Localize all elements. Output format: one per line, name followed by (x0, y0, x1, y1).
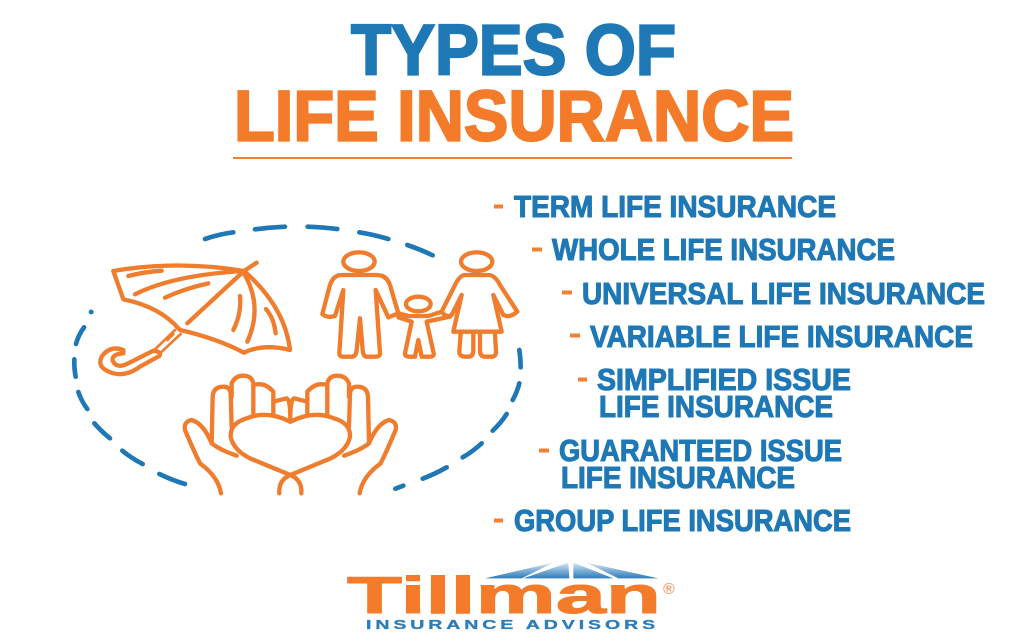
item: variable: VARIABLE LIFE INSURANCE (590, 319, 973, 354)
illustration: icons in dashed ring (74, 227, 521, 493)
list: life insurance types (494, 189, 985, 538)
item: guaranteed issue: LIFE INSURANCE (561, 460, 795, 495)
item: term: TERM LIFE INSURANCE (514, 189, 836, 224)
dashed ellipse ring (74, 227, 521, 489)
item: simplified issue (597, 362, 851, 424)
title line: types of: TYPES OF (351, 12, 676, 90)
child (398, 297, 450, 357)
icon: family (322, 252, 517, 357)
logo tagline: INSURANCE ADVISORS (366, 618, 659, 632)
father (322, 252, 398, 357)
item: guaranteed issue: GUARANTEED ISSUE (559, 433, 842, 468)
icon: umbrella (100, 263, 290, 374)
logo wordmark: Tillman (347, 567, 661, 625)
right hand (290, 376, 396, 493)
item: group: GROUP LIFE INSURANCE (514, 503, 851, 538)
title (234, 12, 794, 156)
item: simplified issue: LIFE INSURANCE (599, 389, 833, 424)
title line: life insurance: LIFE INSURANCE (234, 78, 794, 156)
mother (442, 252, 517, 357)
item: simplified issue: SIMPLIFIED ISSUE (597, 362, 851, 397)
icon: hands holding heart (185, 376, 396, 493)
logo: Tillman Insurance Advisors (347, 563, 675, 632)
orange list dashes (494, 204, 587, 522)
item: universal: UNIVERSAL LIFE INSURANCE (582, 276, 985, 311)
item: whole: WHOLE LIFE INSURANCE (552, 232, 895, 267)
left hand (185, 376, 290, 493)
registered mark: ® (663, 581, 675, 598)
heart (231, 415, 350, 475)
item: guaranteed issue (559, 433, 842, 495)
logo roof icon (485, 563, 658, 578)
